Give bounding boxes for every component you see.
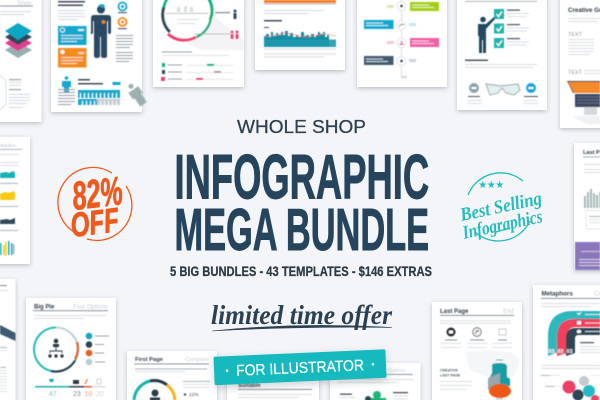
panel: metaphors page: 02 xyxy=(558,349,564,355)
badge: best selling infographics xyxy=(457,173,544,244)
heading: whole shop: WHOLE SHOP xyxy=(237,117,366,137)
panel: big pie page: 10 xyxy=(84,391,92,398)
subheading: bundle stats: 5 BIG BUNDLES - 43 TEMPLATES - $146 EXTRAS xyxy=(170,264,432,279)
panel: first page: Compare xyxy=(185,357,209,363)
panel: metaphors page: 03 xyxy=(548,349,555,355)
panel: last page with 3D shape xyxy=(432,302,522,400)
banner: for illustrator: FOR ILLUSTRATOR xyxy=(236,357,364,380)
badge: 82% off: 82% xyxy=(70,169,125,219)
panel: big pie page: 23 xyxy=(73,391,81,398)
script: limited time offer: limited time offer xyxy=(211,300,392,330)
panel: metaphors page: 03 xyxy=(566,349,573,355)
panel: laptop page: TEXT xyxy=(568,32,583,38)
panel: suitable page: Suitable xyxy=(238,383,261,389)
panel: last page with 3D shape: LAST PAGE xyxy=(440,374,461,378)
panel: human body page xyxy=(51,0,149,112)
panel: last page right edge: Last P xyxy=(583,150,600,156)
panel: layered stack page: Style xyxy=(17,0,32,7)
panel: timeline page xyxy=(357,0,447,87)
panel: big pie page: Four Options xyxy=(73,304,108,310)
panel: laptop page xyxy=(560,0,600,128)
badge: best selling infographics: Infographics xyxy=(460,206,544,244)
panel: pointing person page xyxy=(457,0,547,110)
panel: first page: 12% xyxy=(189,392,199,398)
panel: big pie page: Big Pie xyxy=(34,304,55,310)
panel: first page xyxy=(127,351,217,400)
panel: bottom-left edge page xyxy=(0,279,16,400)
panel: bar chart page xyxy=(255,0,345,70)
badge: 82% off xyxy=(58,167,132,245)
panel: suitable page xyxy=(227,370,319,400)
panel: layered stack page xyxy=(0,0,42,122)
badge: best selling infographics: Best Selling xyxy=(457,188,544,226)
panel: big pie page xyxy=(26,298,116,400)
badge: best selling infographics: ★★★ xyxy=(478,180,504,191)
panel: first page: First Page xyxy=(135,357,164,363)
panel: last page with 3D shape: CREATIVE xyxy=(440,368,459,372)
title: mega bundle: MEGA BUNDLE xyxy=(174,198,429,264)
banner: for illustrator xyxy=(213,349,387,385)
panel: area charts page xyxy=(0,137,30,264)
panel: last page with 3D shape: Last Page xyxy=(440,309,469,315)
panel: area charts page: draulics xyxy=(0,143,16,148)
panel: puzzle page xyxy=(330,363,420,400)
panel: big pie page: 47 xyxy=(49,391,57,398)
panel: laptop page: TEXT xyxy=(568,70,583,76)
badge: 82% off: OFF xyxy=(68,201,122,245)
panel: metaphors page: Metaphors xyxy=(542,290,573,298)
panel: metaphors page xyxy=(533,285,600,400)
panel: last page with 3D shape: End xyxy=(503,309,514,315)
panel: green ring chart page xyxy=(153,0,244,87)
panel: puzzle page: Options xyxy=(388,368,406,374)
panel: big pie page: 20 xyxy=(96,391,104,398)
title: infographic: INFOGRAPHIC xyxy=(174,141,429,212)
panel: last page right edge xyxy=(574,143,600,270)
